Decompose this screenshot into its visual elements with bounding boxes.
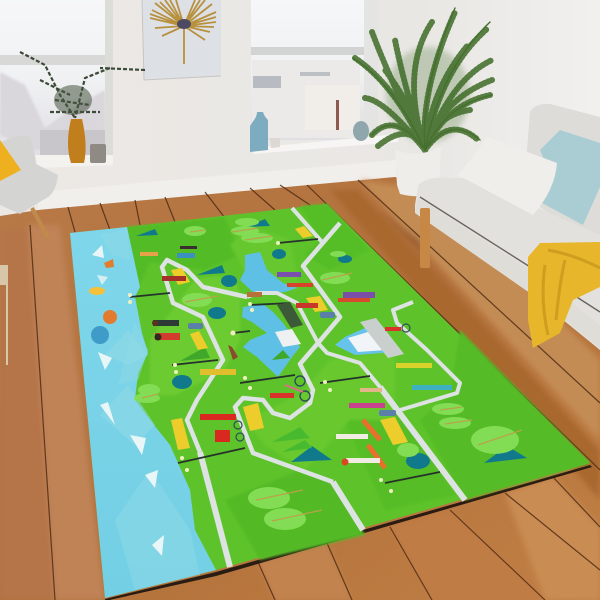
light hill <box>150 277 240 395</box>
bins <box>188 312 396 416</box>
rug <box>70 204 592 600</box>
sofa <box>415 104 600 350</box>
clouds and planets <box>89 245 164 556</box>
rug shadow edge <box>105 465 592 600</box>
glass ornament <box>353 121 369 141</box>
footbridge <box>247 292 262 297</box>
plant pot <box>395 147 441 196</box>
poster with palm <box>142 0 221 80</box>
lamps <box>130 239 440 483</box>
teal conifers <box>136 219 527 469</box>
blue vase <box>250 112 268 152</box>
center window <box>251 0 398 154</box>
wooden floor <box>0 177 600 600</box>
darker grass zones <box>127 204 590 560</box>
left vase with branches <box>20 52 145 163</box>
people <box>140 246 452 468</box>
side table <box>0 265 8 365</box>
large palm plant <box>353 8 492 150</box>
chair <box>0 136 58 238</box>
paths <box>162 208 465 567</box>
mountains on water <box>100 229 200 590</box>
blue pillow <box>540 130 600 225</box>
fountain <box>335 318 404 358</box>
rug base green <box>70 204 590 598</box>
lower lake <box>242 304 300 377</box>
wall baseboard <box>38 160 396 210</box>
fence <box>277 302 303 328</box>
upper lake <box>240 252 297 294</box>
light trees <box>134 218 519 530</box>
benches <box>171 226 408 450</box>
tree trunks <box>142 228 522 521</box>
yellow throw blanket <box>528 242 600 348</box>
small plant pot <box>270 138 280 148</box>
water strip <box>70 227 216 598</box>
white pillow <box>458 137 557 215</box>
left window <box>0 0 113 168</box>
white goal square <box>275 329 301 347</box>
wall <box>0 0 600 300</box>
